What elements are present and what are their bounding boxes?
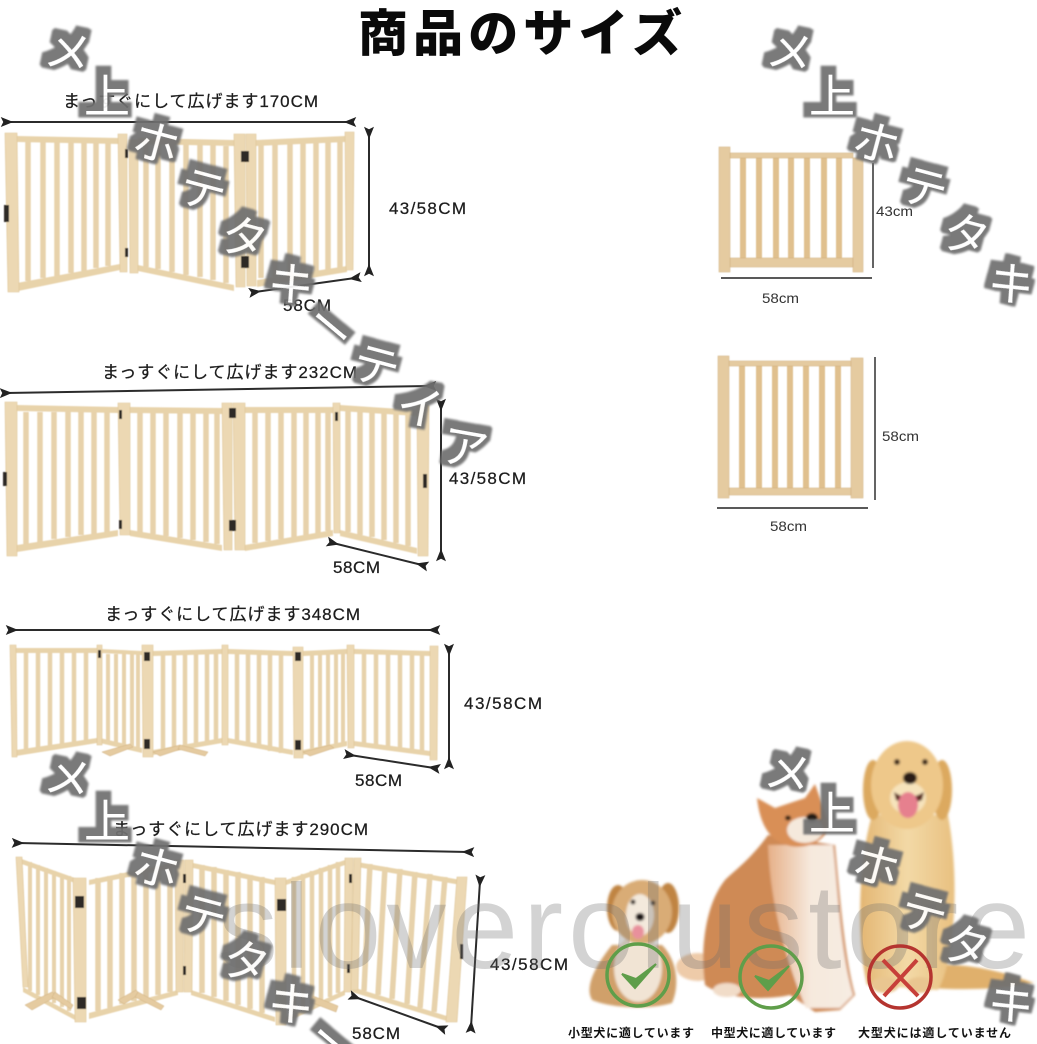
watermark: diagonal text top left: イ [393, 379, 447, 438]
dimensions: gate 58cm: 58cm [882, 428, 919, 444]
dimension labels: fence 290cm [18, 820, 568, 1043]
dimensions: gate 58cm [717, 357, 919, 534]
watermark: diagonal text bottom right [760, 743, 1037, 1035]
watermark: diagonal text top right: タ [937, 204, 995, 267]
watermark: diagonal text bottom left: テ [174, 885, 232, 948]
watermark: diagonal text top left: テ [174, 159, 232, 222]
dimensions: gate 43cm [721, 163, 913, 306]
dimension labels: fence 170cm: 58CM [283, 296, 331, 315]
watermark: diagonal text bottom right: テ [895, 882, 953, 945]
watermark: diagonal text bottom left: メ [40, 748, 96, 809]
watermark: diagonal text bottom left [40, 748, 367, 1044]
fence: three panels 170cm [4, 132, 354, 292]
dimension labels: fence 348cm [12, 605, 542, 790]
watermark: diagonal text bottom right: タ [937, 915, 995, 978]
dimension labels: fence 170cm: まっすぐにして広げます170CM [63, 92, 318, 111]
watermark: diagonal text top left: タ [215, 207, 273, 270]
watermark: diagonal text top right [762, 22, 1037, 316]
dimension labels: fence 290cm: まっすぐにして広げます290CM [113, 820, 368, 839]
watermark: diagonal text bottom right: メ [760, 743, 816, 804]
dimension labels: fence 232cm: 43/58CM [449, 469, 526, 488]
dimensions: gate 43cm: 58cm [762, 290, 799, 306]
dog: shiba inu [676, 784, 855, 1012]
watermark: diagonal text bottom left: 上 [84, 796, 130, 848]
dimension labels: fence 348cm: 58CM [355, 771, 402, 790]
watermark: diagonal text bottom left: キ [262, 973, 320, 1036]
dimension labels: fence 290cm: 43/58CM [490, 955, 568, 974]
icon: green check small dog [607, 944, 669, 1006]
dimension labels: fence 348cm: 43/58CM [464, 694, 542, 713]
watermark: diagonal text top left [40, 22, 492, 478]
watermark: store name: sloverolustore [218, 860, 1030, 994]
watermark: diagonal text top right: メ [762, 22, 818, 83]
fence: six panels 348cm [10, 645, 438, 760]
watermark: diagonal text top right: ホ [847, 112, 905, 175]
watermark: diagonal text top right: テ [895, 157, 953, 220]
dimension labels: fence 232cm: 58CM [333, 558, 380, 577]
watermark: diagonal text bottom left: タ [217, 931, 275, 994]
watermark: diagonal text top left: キ [262, 253, 320, 316]
watermark: diagonal text bottom right: ホ [847, 835, 905, 898]
fence: four panels 232cm [3, 402, 429, 556]
watermark: diagonal text top right: 上 [809, 71, 855, 123]
watermark: diagonal text bottom right: 上 [809, 788, 855, 840]
dimension labels: fence 170cm: 43/58CM [389, 199, 466, 218]
watermark: diagonal text top left: テ [347, 335, 405, 398]
dog: small poodle mix [589, 880, 679, 1007]
watermark: diagonal text bottom left: ホ [127, 837, 185, 900]
watermark: diagonal text top left: 上 [84, 71, 130, 123]
single gate 43cm [719, 147, 863, 272]
watermark: diagonal text top left: ホ [127, 112, 185, 175]
dimension labels: fence 232cm [6, 363, 526, 577]
watermark: diagonal text top left: メ [40, 22, 96, 83]
dimension labels: fence 348cm: まっすぐにして広げます348CM [105, 605, 360, 624]
icon: green check medium dog [740, 946, 802, 1008]
fence: five panels 290cm [16, 857, 467, 1025]
watermark: diagonal text top left: ア [438, 419, 492, 478]
icon: red cross large dog [869, 946, 931, 1008]
watermark: diagonal text top left: ー [296, 293, 365, 362]
caption: medium dogs: 中型犬に適しています [711, 1025, 836, 1040]
dimension labels: fence 290cm: 58CM [352, 1024, 400, 1043]
dog: golden retriever [860, 741, 1034, 993]
single gate 58cm [718, 356, 863, 498]
caption: small dogs: 小型犬に適しています [568, 1025, 694, 1040]
dimensions: gate 43cm: 43cm [876, 203, 913, 219]
dimension labels: fence 170cm [7, 92, 466, 315]
caption: large dogs: 大型犬には適していません [858, 1025, 1011, 1040]
dimensions: gate 58cm: 58cm [770, 518, 807, 534]
dimension labels: fence 232cm: まっすぐにして広げます232CM [102, 363, 357, 382]
